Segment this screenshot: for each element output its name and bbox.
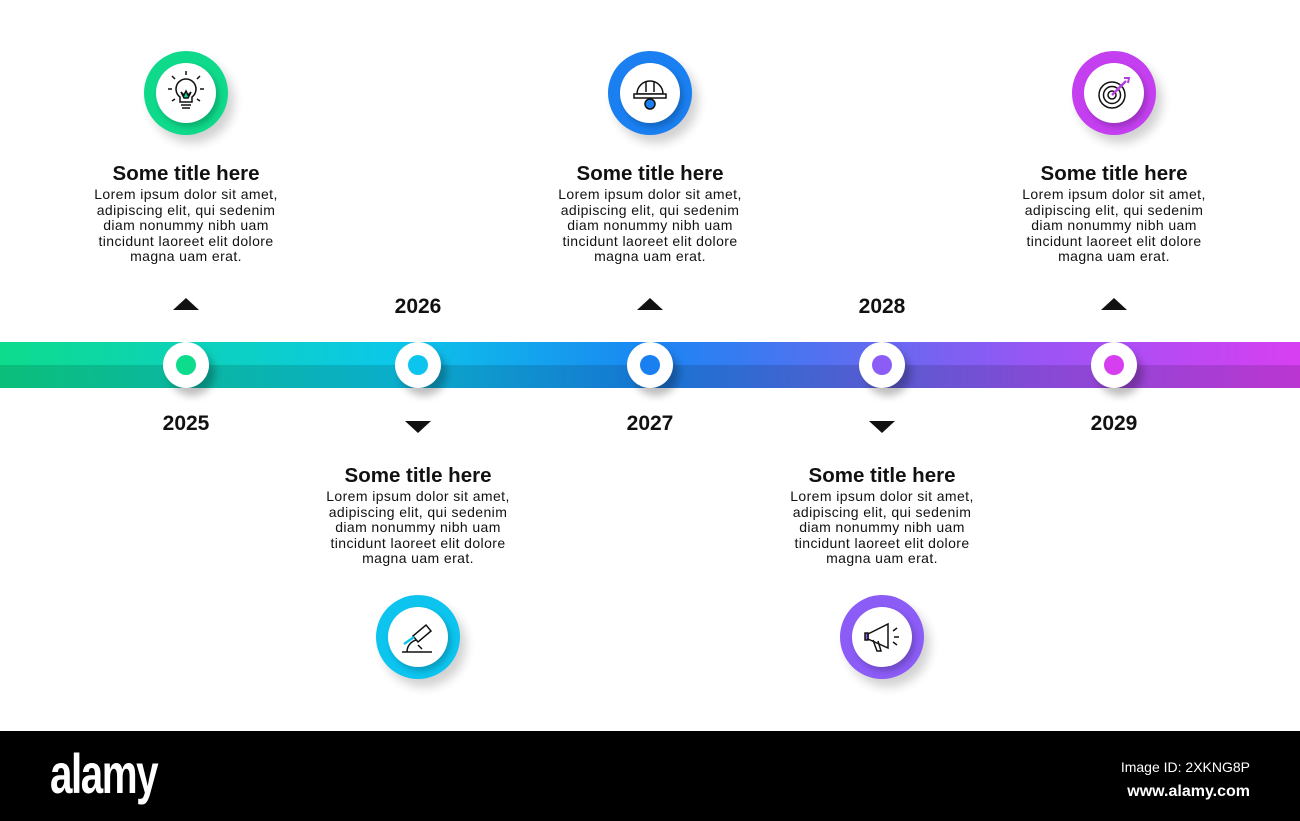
- year 2025: 2025: [163, 412, 209, 435]
- text block 5: diam nonummy nibh uam: [1031, 217, 1197, 233]
- node 2029: [1091, 342, 1137, 388]
- arrow up 3: [637, 298, 663, 310]
- text block 3: [558, 162, 742, 264]
- icon: light bulb: [144, 51, 228, 135]
- text block 1: diam nonummy nibh uam: [103, 217, 269, 233]
- text block 5: [1022, 162, 1206, 264]
- text block 4: Lorem ipsum dolor sit amet,: [790, 488, 974, 504]
- arrow up 1: [173, 298, 199, 310]
- text block 5: Lorem ipsum dolor sit amet,: [1022, 186, 1206, 202]
- text block 5: tincidunt laoreet elit dolore: [1026, 233, 1202, 249]
- text block 1: [94, 162, 278, 264]
- arrow up 5: [1101, 298, 1127, 310]
- arrow down 2: [405, 421, 431, 433]
- text block 2: Some title here: [345, 464, 491, 487]
- text block 4: diam nonummy nibh uam: [799, 519, 965, 535]
- text block 2: tincidunt laoreet elit dolore: [330, 535, 506, 551]
- text block 3: diam nonummy nibh uam: [567, 217, 733, 233]
- text block 1: tincidunt laoreet elit dolore: [98, 233, 274, 249]
- footer id: [1121, 759, 1250, 800]
- footer: [0, 731, 1300, 821]
- text block 5: adipiscing elit, qui sedenim: [1025, 202, 1203, 218]
- icon: target: [1072, 51, 1156, 135]
- year 2029: 2029: [1091, 412, 1137, 435]
- node 2025: [163, 342, 209, 388]
- icon: megaphone: [840, 595, 924, 679]
- text block 5: magna uam erat.: [1058, 248, 1170, 264]
- text block 3: tincidunt laoreet elit dolore: [562, 233, 738, 249]
- text block 3: magna uam erat.: [594, 248, 706, 264]
- arrow down 4: [869, 421, 895, 433]
- text block 2: diam nonummy nibh uam: [335, 519, 501, 535]
- node 2027: [627, 342, 673, 388]
- year 2027: 2027: [627, 412, 673, 435]
- text block 3: adipiscing elit, qui sedenim: [561, 202, 739, 218]
- text block 1: magna uam erat.: [130, 248, 242, 264]
- icon: microscope: [376, 595, 460, 679]
- text block 4: magna uam erat.: [826, 550, 938, 566]
- timeline bar: [0, 342, 1300, 388]
- text block 5: Some title here: [1041, 162, 1187, 185]
- footer logo: alamy: [50, 742, 157, 805]
- text block 1: adipiscing elit, qui sedenim: [97, 202, 275, 218]
- text block 3: Lorem ipsum dolor sit amet,: [558, 186, 742, 202]
- text block 4: tincidunt laoreet elit dolore: [794, 535, 970, 551]
- text block 2: adipiscing elit, qui sedenim: [329, 504, 507, 520]
- text block 4: Some title here: [809, 464, 955, 487]
- node 2026: [395, 342, 441, 388]
- icon: helmet: [608, 51, 692, 135]
- text block 1: Lorem ipsum dolor sit amet,: [94, 186, 278, 202]
- node 2028: [859, 342, 905, 388]
- text block 2: Lorem ipsum dolor sit amet,: [326, 488, 510, 504]
- year 2026: 2026: [395, 295, 441, 318]
- text block 1: Some title here: [113, 162, 259, 185]
- text block 2: magna uam erat.: [362, 550, 474, 566]
- text block 3: Some title here: [577, 162, 723, 185]
- text block 2: [326, 464, 510, 566]
- year 2028: 2028: [859, 295, 905, 318]
- footer id: Image ID: 2XKNG8P: [1121, 759, 1250, 775]
- footer id: www.alamy.com: [1127, 783, 1250, 800]
- text block 4: [790, 464, 974, 566]
- text block 4: adipiscing elit, qui sedenim: [793, 504, 971, 520]
